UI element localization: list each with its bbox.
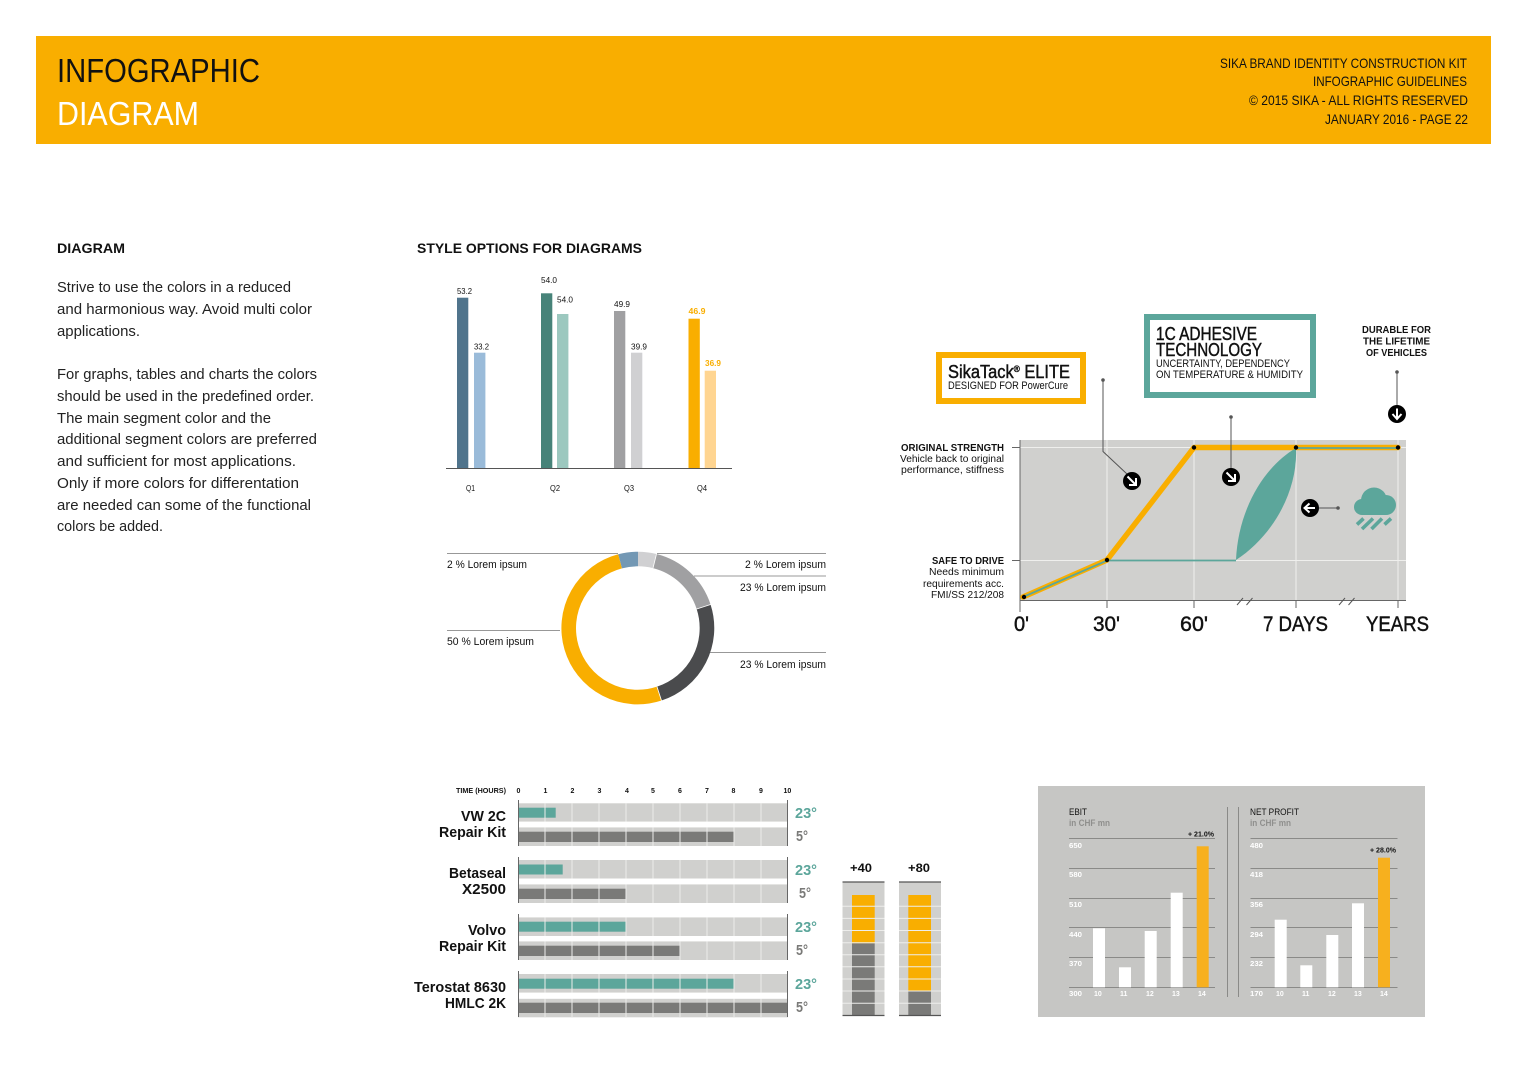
panel: financial charts: [1038, 786, 1425, 1017]
time axis: [456, 788, 791, 795]
segment: light grey: [638, 559, 655, 561]
value labels: 54.0: [557, 296, 574, 304]
temperature labels: 5°: [796, 828, 808, 845]
header banner: [36, 36, 1491, 144]
row: Terostat: HMLC 2K: [445, 995, 506, 1012]
teal curve: [1023, 448, 1398, 597]
y axis labels: Vehicle back to original: [900, 454, 1004, 465]
chart: EBIT: 10: [1094, 991, 1102, 998]
temperature labels: [795, 805, 817, 1016]
donut chart: [447, 554, 826, 701]
chart: EBIT: 580: [1069, 872, 1082, 879]
row: Betaseal: [449, 860, 788, 903]
document info: © 2015 SIKA - ALL RIGHTS RESERVED: [1249, 92, 1468, 108]
bars Q1: [457, 298, 485, 468]
stacked column: +80: +80: [908, 861, 930, 875]
chart: EBIT: 440: [1069, 932, 1082, 939]
chart: net profit: 170: [1250, 991, 1263, 998]
text block: guidance: and sufficient for most applications.: [57, 453, 296, 470]
callout: SikaTack Elite: DESIGNED FOR PowerCure: [948, 380, 1068, 392]
quarter labels: Q2: [550, 484, 561, 493]
row: Terostat: [414, 974, 788, 1017]
heading: style options: STYLE OPTIONS FOR DIAGRAMS: [417, 240, 642, 256]
chart: EBIT: 11: [1120, 991, 1128, 998]
temperature labels: 5°: [796, 999, 808, 1016]
time axis: 0: [516, 788, 520, 795]
temperature labels: 5°: [796, 942, 808, 959]
value labels: 46.9: [688, 307, 706, 316]
row: Betaseal: X2500: [462, 881, 506, 898]
chart: net profit: NET PROFIT: [1250, 807, 1299, 817]
chart: EBIT: 12: [1146, 991, 1154, 998]
title: DIAGRAM: [57, 95, 199, 132]
title: INFOGRAPHIC: [57, 52, 260, 89]
y axis labels: performance, stiffness: [901, 465, 1004, 476]
chart: EBIT: 510: [1069, 902, 1082, 909]
chart: net profit: 480: [1250, 843, 1263, 850]
chart: EBIT: EBIT: [1069, 807, 1087, 817]
chart: net profit: 12: [1328, 991, 1336, 998]
donut labels: [447, 559, 826, 671]
arrow: weather leader: [1301, 499, 1340, 517]
text block: guidance: are needed can some of the functional: [57, 497, 311, 514]
stacked column: +40: +40: [850, 861, 872, 875]
value labels: [457, 276, 722, 368]
quarter labels: Q4: [697, 484, 708, 493]
text block: guidance: Only if more colors for differentation: [57, 475, 299, 492]
time axis: 3: [598, 788, 602, 795]
orange curve: [1023, 448, 1398, 597]
heading: diagram: DIAGRAM: [57, 240, 125, 256]
chart: net profit: 294: [1250, 932, 1263, 939]
segment: dark: [659, 607, 707, 694]
time axis: 10: [784, 788, 791, 795]
y axis labels: ORIGINAL STRENGTH: [901, 443, 1004, 454]
temperature labels: 23°: [795, 862, 817, 879]
x axis labels: [1014, 613, 1429, 636]
time axis: 6: [678, 788, 682, 795]
chart: EBIT: 13: [1172, 991, 1180, 998]
arrow: adhesive leader: [1222, 415, 1240, 486]
donut labels: 23 % Lorem ipsum: [740, 582, 826, 594]
callout: durable: THE LIFETIME: [1363, 336, 1430, 348]
chart: net profit: 356: [1250, 902, 1263, 909]
chart: net profit: + 28.0%: [1370, 848, 1397, 854]
row: Betaseal: Betaseal: [449, 865, 506, 882]
callout: 1C adhesive technology: 1C ADHESIVE: [1156, 324, 1257, 344]
x axis labels: 0': [1014, 613, 1029, 636]
chart: net profit: [1250, 807, 1398, 998]
text block: guidance: The main segment color and the: [57, 410, 271, 427]
chart: net profit: 418: [1250, 872, 1263, 879]
time axis: 4: [625, 788, 629, 795]
chart: net profit: in CHF mn: [1250, 818, 1291, 828]
stacked column: +80: [899, 861, 941, 1016]
text block: guidance: should be used in the predefined order.: [57, 388, 314, 405]
callout: 1C adhesive technology: TECHNOLOGY: [1156, 340, 1262, 360]
temperature labels: 23°: [795, 919, 817, 936]
quarter labels: Q1: [466, 484, 475, 493]
chart: net profit: 13: [1354, 991, 1362, 998]
time axis: 2: [570, 788, 574, 795]
bar chart: quarterly: [446, 276, 732, 493]
callout: SikaTack Elite: ®: [1014, 364, 1020, 374]
quarter labels: Q3: [624, 484, 635, 493]
chart: EBIT: 300: [1069, 991, 1082, 998]
callout: durable: [1362, 325, 1432, 359]
callout: durable: OF VEHICLES: [1366, 348, 1427, 359]
text block: guidance: [57, 279, 317, 535]
document info: JANUARY 2016 - PAGE 22: [1325, 111, 1468, 127]
chart: net profit: 232: [1250, 961, 1263, 968]
value labels: 54.0: [541, 276, 558, 285]
segment: orange: [569, 561, 659, 697]
document info: [1220, 55, 1468, 127]
value labels: 36.9: [705, 359, 722, 368]
temperature labels: 5°: [799, 885, 811, 902]
callout: 1C adhesive technology: [1147, 317, 1313, 395]
bars Q2: [541, 293, 568, 468]
chart: net profit: 11: [1302, 991, 1310, 998]
value labels: 53.2: [457, 287, 473, 296]
time axis: 5: [651, 788, 655, 795]
value labels: 49.9: [614, 300, 631, 309]
text block: guidance: additional segment colors are preferred: [57, 431, 317, 448]
callout: SikaTack Elite: ELITE: [1020, 362, 1070, 382]
gantt chart: curing time: [414, 788, 817, 1018]
document info: INFOGRAPHIC GUIDELINES: [1313, 73, 1467, 89]
icon: rain cloud: [1354, 488, 1396, 529]
segment: grey: [655, 561, 704, 607]
quarter labels: [466, 484, 708, 493]
arrow: SikaTack leader: [1101, 378, 1141, 490]
donut labels: 50 % Lorem ipsum: [447, 636, 534, 648]
y axis labels: requirements acc.: [923, 579, 1004, 590]
bars Q3: [614, 311, 642, 468]
text block: guidance: Strive to use the colors in a reduced: [57, 279, 291, 296]
title: [57, 52, 260, 132]
row: Volvo: [439, 917, 788, 960]
callout: SikaTack Elite: [939, 355, 1083, 401]
callout: 1C adhesive technology: ON TEMPERATURE & HUMIDITY: [1156, 369, 1304, 381]
value labels: 33.2: [474, 342, 490, 352]
temperature labels: 23°: [795, 976, 817, 993]
x axis labels: 30': [1093, 613, 1120, 636]
chart: net profit: 10: [1276, 991, 1284, 998]
chart: EBIT: 650: [1069, 843, 1082, 850]
temperature labels: 23°: [795, 805, 817, 822]
y axis labels: FMI/SS 212/208: [931, 590, 1004, 601]
row: Volvo: Volvo: [468, 922, 506, 939]
chart: EBIT: 14: [1198, 991, 1206, 998]
callout: durable: DURABLE FOR: [1362, 325, 1432, 336]
callout: SikaTack Elite: SikaTack: [948, 362, 1020, 382]
line chart: strength over time: [900, 440, 1429, 636]
time axis: 1: [544, 788, 548, 795]
row: VW 2C: [439, 803, 788, 846]
x axis labels: YEARS: [1366, 613, 1429, 636]
bars Q4: [688, 319, 716, 468]
x axis labels: 7 DAYS: [1263, 613, 1328, 636]
text block: guidance: For graphs, tables and charts the colors: [57, 366, 317, 383]
x axis labels: 60': [1180, 613, 1208, 636]
value labels: 39.9: [631, 342, 648, 352]
row: VW 2C: Repair Kit: [439, 824, 506, 841]
donut labels: 23 % Lorem ipsum: [740, 659, 826, 671]
row: Volvo: Repair Kit: [439, 938, 506, 955]
y axis labels: [900, 443, 1004, 601]
chart: EBIT: + 21.0%: [1188, 832, 1215, 838]
chart: EBIT: [1069, 807, 1215, 998]
chart: EBIT: in CHF mn: [1069, 818, 1110, 828]
data points: [1022, 445, 1400, 599]
text block: guidance: and harmonious way. Avoid multi color: [57, 301, 312, 318]
row: Terostat: Terostat 8630: [414, 979, 506, 996]
time axis: 8: [732, 788, 736, 795]
arrow: durable leader: [1388, 370, 1406, 423]
callout: 1C adhesive technology: UNCERTAINTY, DEPENDENCY: [1156, 358, 1291, 370]
text block: guidance: colors be added.: [57, 518, 163, 535]
time axis: TIME (HOURS): [456, 788, 506, 795]
segment: blue: [620, 559, 638, 561]
time axis: 9: [759, 788, 763, 795]
plot background: [1020, 440, 1406, 600]
y axis labels: SAFE TO DRIVE: [932, 556, 1004, 567]
chart: net profit: 14: [1380, 991, 1388, 998]
document info: SIKA BRAND IDENTITY CONSTRUCTION KIT: [1220, 55, 1467, 71]
teal leaf: [1236, 448, 1296, 560]
stacked column: +40: [842, 861, 884, 1016]
time axis: 7: [705, 788, 709, 795]
chart: EBIT: 370: [1069, 961, 1082, 968]
text block: guidance: applications.: [57, 323, 140, 340]
row: VW 2C: VW 2C: [461, 808, 506, 825]
donut labels: 2 % Lorem ipsum: [447, 559, 527, 571]
y axis labels: Needs minimum: [929, 567, 1004, 578]
donut labels: 2 % Lorem ipsum: [745, 559, 826, 571]
